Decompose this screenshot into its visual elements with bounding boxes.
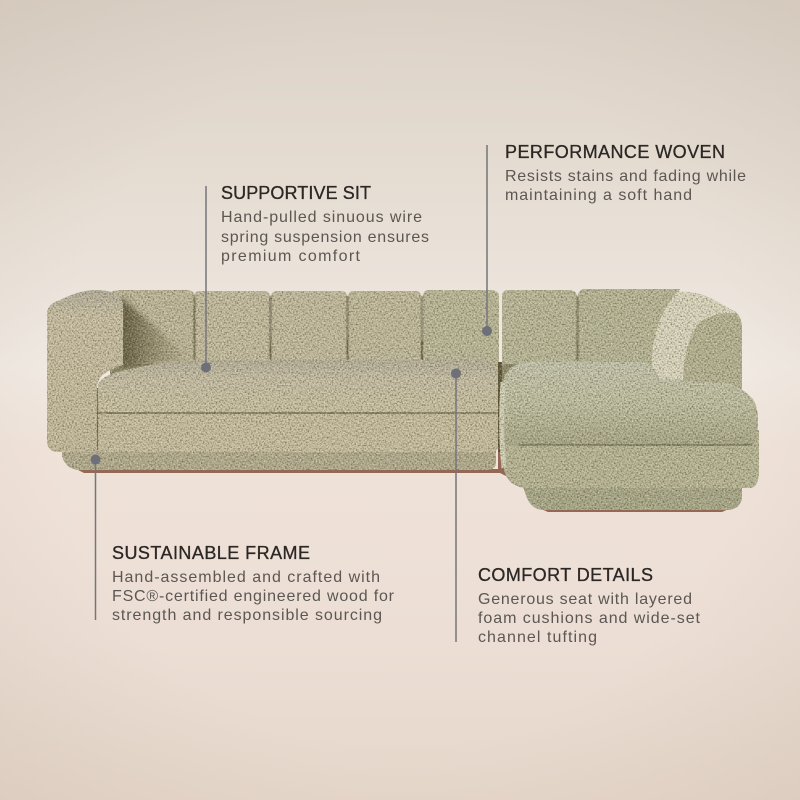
description: strength and responsible sourcing: [112, 607, 382, 624]
description: [112, 569, 395, 624]
description: spring suspension ensures: [221, 229, 429, 246]
heading: SUPPORTIVE SIT: [221, 183, 371, 203]
chaise seat cushion: [500, 362, 758, 445]
description: Generous seat with layered: [478, 591, 692, 608]
callout: performance woven: [482, 142, 746, 336]
description: Hand-assembled and crafted with: [112, 569, 380, 586]
plinth, left section: [62, 450, 496, 470]
callout: supportive sit: [201, 183, 429, 372]
marker dot: [482, 326, 492, 336]
cushion channel seams: [194, 296, 578, 360]
gap between left section and chaise: [498, 362, 502, 452]
description: channel tufting: [478, 629, 597, 646]
seat cushion, left section: [98, 360, 499, 413]
marker dot: [201, 362, 211, 372]
right arm: [651, 292, 742, 392]
callout: sustainable frame: [90, 454, 395, 624]
description: Hand-pulled sinuous wire: [221, 209, 422, 226]
leader line: [455, 373, 457, 642]
base fill behind cushions: [110, 340, 660, 410]
floor shadow: [76, 450, 736, 512]
callout: comfort details: [451, 368, 701, 646]
heading: PERFORMANCE WOVEN: [505, 142, 725, 162]
description: [478, 591, 701, 646]
description: [221, 209, 429, 265]
arm shadow on back cushion: [120, 296, 192, 368]
marker dot: [90, 454, 100, 464]
leader line: [205, 186, 207, 367]
back cushions, right section: [502, 289, 680, 375]
chaise lower cushion: [501, 430, 759, 488]
leader line: [94, 459, 96, 620]
leader line: [486, 145, 488, 330]
left arm: [47, 290, 123, 452]
description: premium comfort: [221, 248, 361, 265]
back cushions, left section: [110, 290, 499, 372]
description: FSC®-certified engineered wood for: [112, 588, 395, 605]
chaise light left edge: [502, 382, 504, 468]
heading: COMFORT DETAILS: [478, 565, 653, 585]
marker dot: [451, 368, 461, 378]
description: foam cushions and wide-set: [478, 610, 701, 627]
lower cushion, left section: [97, 412, 498, 452]
description: maintaining a soft hand: [505, 187, 692, 204]
sofa seams: [98, 388, 752, 450]
plinth, chaise: [522, 484, 742, 510]
heading: SUSTAINABLE FRAME: [112, 543, 310, 563]
sofa: [47, 289, 759, 512]
description: Resists stains and fading while: [505, 168, 746, 185]
description: [505, 168, 746, 204]
